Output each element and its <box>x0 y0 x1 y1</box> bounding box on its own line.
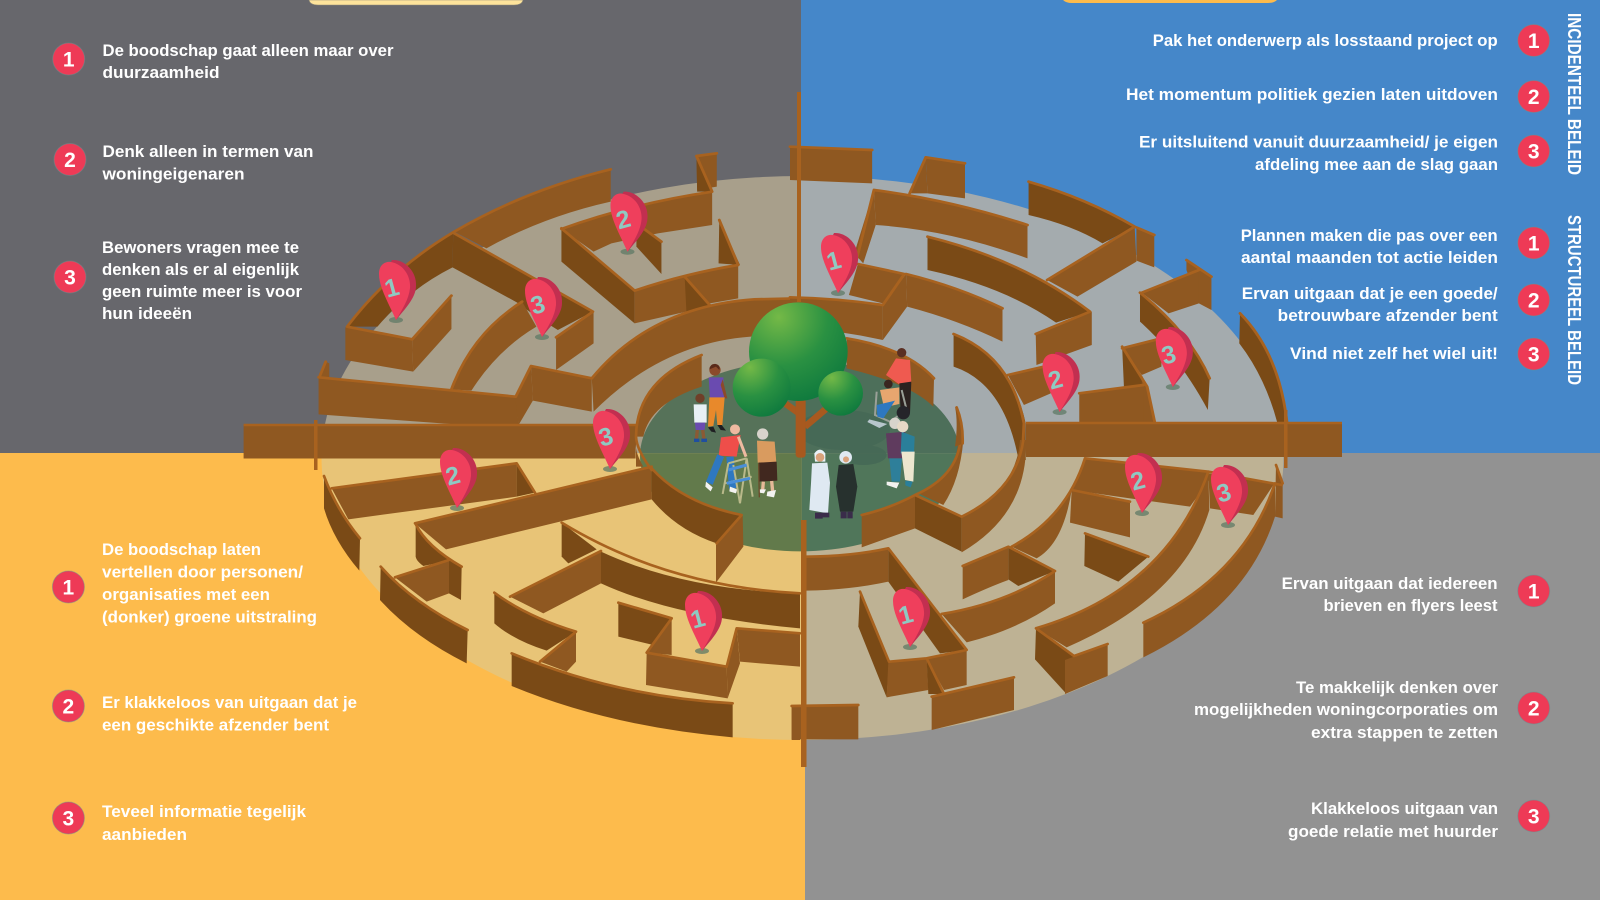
panel: bottom left list <box>52 540 357 844</box>
pin 2 bottom right <box>1125 453 1162 516</box>
pin 1 top left <box>379 260 416 323</box>
vertical pole top <box>797 92 801 302</box>
item 1: brieven en flyers leest <box>1324 596 1498 615</box>
maze floor <box>300 160 1303 753</box>
item 1: 1 <box>1528 580 1540 604</box>
central horizontal wall bars <box>244 410 1342 470</box>
item: incidenteel 2: Het momentum politiek gezien laten uitdoven <box>1126 85 1498 104</box>
item 3: Bewoners vragen mee te <box>102 238 299 257</box>
person: embracing couple <box>886 418 915 488</box>
pin 2 bottom left: 2 <box>443 461 463 492</box>
item: incidenteel 1 <box>1153 24 1550 56</box>
top tab: left <box>309 0 523 5</box>
item 1 <box>1282 574 1550 615</box>
item 1: Ervan uitgaan dat iedereen <box>1282 574 1498 593</box>
item 3 <box>1288 799 1550 841</box>
item: structureel 1: Plannen maken die pas over een <box>1241 226 1498 245</box>
item: incidenteel 3: 3 <box>1528 140 1540 164</box>
item: incidenteel 3: Er uitsluitend vanuit duurzaamheid/ je eigen <box>1139 133 1498 152</box>
item 3: 3 <box>1528 806 1540 828</box>
pin 1 top right: 1 <box>824 246 844 277</box>
pin 2 top right: 2 <box>1045 365 1066 396</box>
rotated label: incidenteel beleid: INCIDENTEEL BELEID <box>1564 13 1584 175</box>
pin 1 bottom right: 1 <box>896 600 916 631</box>
pin 1 bottom left: 1 <box>688 604 708 635</box>
green clearing <box>640 364 958 552</box>
person: man in white robe <box>809 450 830 519</box>
pin 3 top left: 3 <box>528 290 548 321</box>
pin 2 top left: 2 <box>613 205 634 235</box>
pin 3 bottom right: 3 <box>1214 478 1234 509</box>
person: child <box>694 394 707 442</box>
item 3 <box>54 238 302 323</box>
item 2 <box>54 142 314 184</box>
item: structureel 3 <box>1290 338 1550 370</box>
pin 1 top left: 1 <box>382 273 402 304</box>
item 1 <box>52 540 317 626</box>
pin 2 bottom left <box>440 448 477 511</box>
item: structureel 2: Ervan uitgaan dat je een goede/ <box>1242 284 1498 303</box>
item 1 <box>53 41 394 82</box>
maze <box>244 92 1342 767</box>
person: elderly woman <box>757 428 777 497</box>
item 3: geen ruimte meer is voor <box>102 282 302 301</box>
item 3: hun ideeën <box>102 304 192 323</box>
item 3: Klakkeloos uitgaan van <box>1311 799 1498 818</box>
item 2: 2 <box>1528 698 1540 720</box>
person: woman in dark dress <box>836 451 857 518</box>
item: structureel 2: 2 <box>1528 290 1540 312</box>
tree shadow <box>797 410 890 465</box>
item 2: extra stappen te zetten <box>1311 723 1498 742</box>
item 2: Denk alleen in termen van <box>102 142 314 161</box>
item: incidenteel 1: 1 <box>1528 30 1540 53</box>
pin 1 bottom left <box>685 591 722 654</box>
pin 1 top right <box>821 233 858 296</box>
item: incidenteel 3 <box>1139 133 1550 174</box>
walls: bottom right quadrant <box>792 440 1283 739</box>
pin 3 top left <box>525 277 562 340</box>
central garden <box>635 302 963 519</box>
item 1: 1 <box>63 48 75 72</box>
inner ring walls <box>635 338 963 470</box>
item 2: 2 <box>64 149 76 172</box>
map pins <box>379 192 1248 654</box>
walls: top right quadrant <box>790 147 1287 460</box>
item 1: duurzaamheid <box>102 63 220 82</box>
item 3: 3 <box>63 808 74 830</box>
item 1: vertellen door personen/ <box>102 562 303 582</box>
item: incidenteel 3: afdeling mee aan de slag gaan <box>1255 155 1498 174</box>
top tab: right <box>1063 0 1277 3</box>
item: structureel 1 <box>1241 226 1550 267</box>
panel: bottom right list <box>1194 574 1550 841</box>
pin 2 bottom right: 2 <box>1128 466 1148 497</box>
vertical pole bottom <box>801 520 806 767</box>
item 2 <box>52 690 357 734</box>
item 2: 2 <box>63 696 74 718</box>
item: structureel 3: 3 <box>1528 344 1540 366</box>
pin 1 bottom right <box>893 587 930 650</box>
walls: top left quadrant <box>319 153 800 425</box>
item 3: Teveel informatie tegelijk <box>102 802 307 821</box>
pin 2 top right <box>1043 352 1080 415</box>
pin 3 top right: 3 <box>1158 340 1179 371</box>
item: structureel 1: aantal maanden tot actie leiden <box>1241 248 1498 267</box>
pin 2 top left <box>610 192 648 255</box>
item 1: De boodschap gaat alleen maar over <box>102 41 394 60</box>
item 2: Er klakkeloos van uitgaan dat je <box>102 693 357 712</box>
pin 3 center left <box>593 409 630 472</box>
item 2: woningeigenaren <box>101 164 244 184</box>
item 2: mogelijkheden woningcorporaties om <box>1194 700 1498 719</box>
item 1: 1 <box>63 576 75 600</box>
rotated label: structureel beleid: STRUCTUREEL BELEID <box>1564 215 1584 385</box>
item 1: (donker) groene uitstraling <box>102 608 317 626</box>
item 2 <box>1194 678 1550 742</box>
pin 3 top right <box>1156 327 1193 390</box>
item 3: goede relatie met huurder <box>1288 822 1498 841</box>
walls: bottom left quadrant <box>324 463 800 740</box>
item: incidenteel 1: Pak het onderwerp als losstaand project op <box>1153 31 1498 50</box>
item: structureel 2 <box>1242 284 1550 325</box>
person: man with walker <box>705 424 753 503</box>
item: structureel 1: 1 <box>1528 232 1540 256</box>
item: incidenteel 2 <box>1126 80 1550 112</box>
item: structureel 2: betrouwbare afzender bent <box>1278 306 1498 325</box>
panel: top right list <box>1126 24 1550 370</box>
item 1: organisaties met een <box>102 585 270 604</box>
pin 3 center left: 3 <box>596 422 616 453</box>
item 3 <box>52 802 307 844</box>
item 2: Te makkelijk denken over <box>1296 678 1498 697</box>
item 3: aanbieden <box>102 825 187 844</box>
item 3: denken als er al eigenlijk <box>102 260 300 279</box>
item 1: De boodschap laten <box>102 540 261 559</box>
item: incidenteel 2: 2 <box>1528 86 1540 109</box>
person: woman in purple <box>708 364 727 433</box>
pin 3 bottom right <box>1211 465 1248 528</box>
person: caregiver and wheelchair <box>867 348 911 428</box>
tree <box>733 302 863 458</box>
item: structureel 3: Vind niet zelf het wiel uit! <box>1290 344 1498 363</box>
panel: top left list <box>53 41 394 323</box>
item 3: 3 <box>64 266 76 290</box>
item 2: een geschikte afzender bent <box>102 716 329 734</box>
